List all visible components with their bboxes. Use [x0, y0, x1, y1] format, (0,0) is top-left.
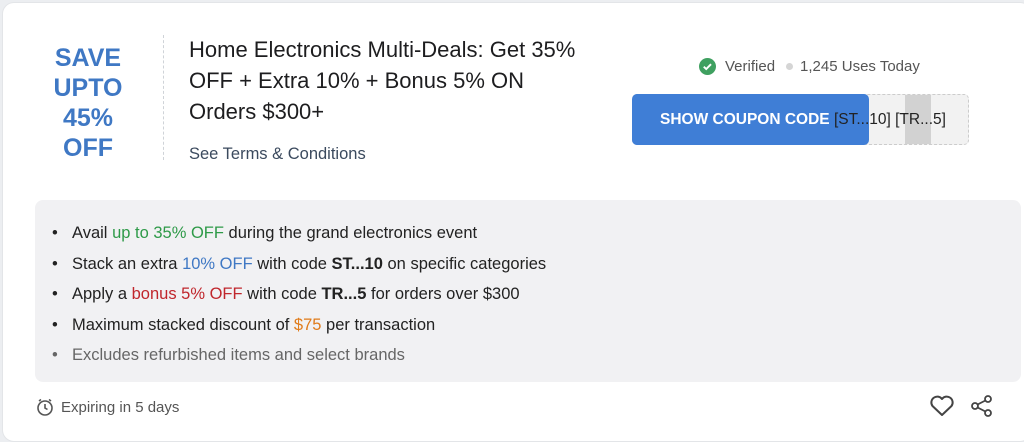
details list: Apply a bonus 5% OFF with code TR...5 for orders over $300	[72, 285, 520, 303]
title: OFF + Extra 10% + Bonus 5% ON	[189, 68, 524, 93]
details list: Avail up to 35% OFF during the grand electronics event	[72, 224, 477, 242]
details list: Maximum stacked discount of $75 per transaction	[72, 316, 435, 334]
save badge	[54, 44, 122, 162]
title	[189, 37, 575, 124]
verified status: 1,245 Uses Today	[800, 58, 920, 75]
details list	[52, 224, 546, 364]
icon: share	[971, 395, 992, 417]
expiry: Expiring in 5 days	[61, 398, 179, 416]
save badge: OFF	[63, 134, 113, 162]
terms link: See Terms & Conditions	[189, 145, 366, 163]
verified status: Verified	[725, 58, 775, 75]
save badge: 45%	[63, 104, 113, 132]
title: Orders $300+	[189, 99, 324, 124]
details panel	[35, 200, 1021, 382]
divider	[163, 35, 164, 160]
title: Home Electronics Multi-Deals: Get 35%	[189, 37, 575, 62]
save badge: UPTO	[54, 74, 122, 102]
icon: heart	[930, 396, 954, 416]
save badge: SAVE	[55, 44, 121, 72]
details list: Excludes refurbished items and select brands	[72, 346, 405, 364]
details list: Stack an extra 10% OFF with code ST...10 on specific categories	[72, 254, 546, 272]
coupon button: SHOW COUPON CODE [ST...10] [TR...5]	[660, 111, 946, 128]
verified status	[699, 58, 920, 75]
coupon button	[632, 94, 969, 145]
